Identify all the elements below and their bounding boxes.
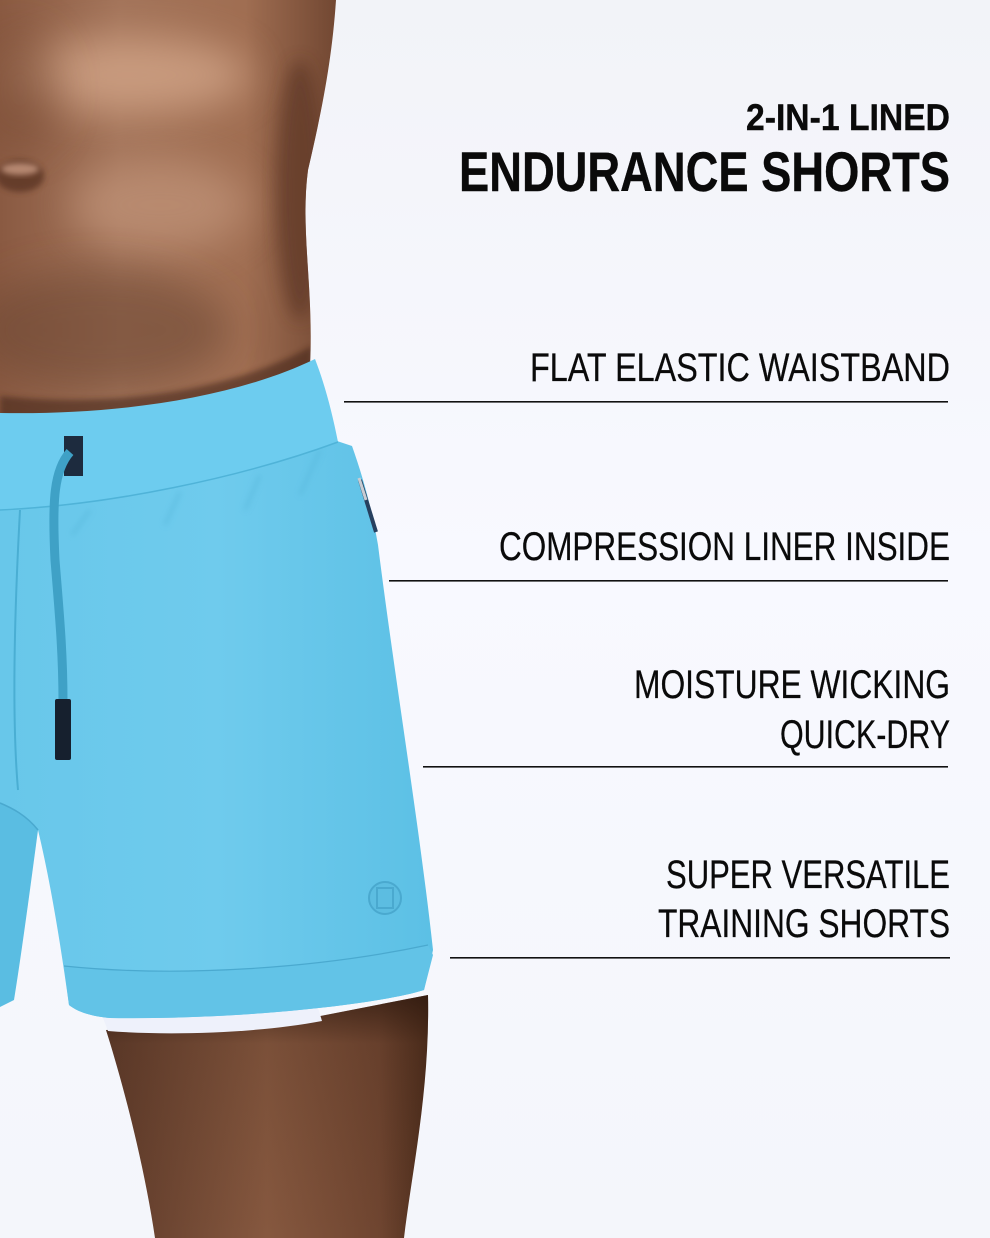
- side pocket zipper: [360, 480, 376, 532]
- drawcord aglet: [55, 699, 71, 760]
- shorts body: [0, 440, 433, 1018]
- feature: moisture wicking quick-dry: [423, 663, 950, 768]
- title: 2-IN-1 LINED: [746, 97, 950, 138]
- logo badge: [369, 882, 401, 914]
- title: [459, 97, 950, 203]
- waistband lower seam: [0, 442, 338, 510]
- shorts crotch shadow: [0, 803, 38, 830]
- shorts waist gathers: [72, 450, 320, 535]
- waistband: [0, 359, 338, 510]
- shorts hem: [64, 945, 433, 1018]
- photo: blue shorts: [0, 359, 433, 1018]
- shorts fly seam: [14, 510, 20, 790]
- drawcord: [54, 452, 70, 702]
- photo: model torso: [0, 0, 340, 430]
- feature: super versatile training shorts: [450, 853, 950, 959]
- photo: white compression liner: [98, 998, 322, 1033]
- shorts left leg sliver: [0, 790, 38, 1007]
- drawcord eyelet: [64, 436, 83, 476]
- photo: lower leg: [106, 995, 428, 1238]
- zipper pull: [359, 478, 366, 500]
